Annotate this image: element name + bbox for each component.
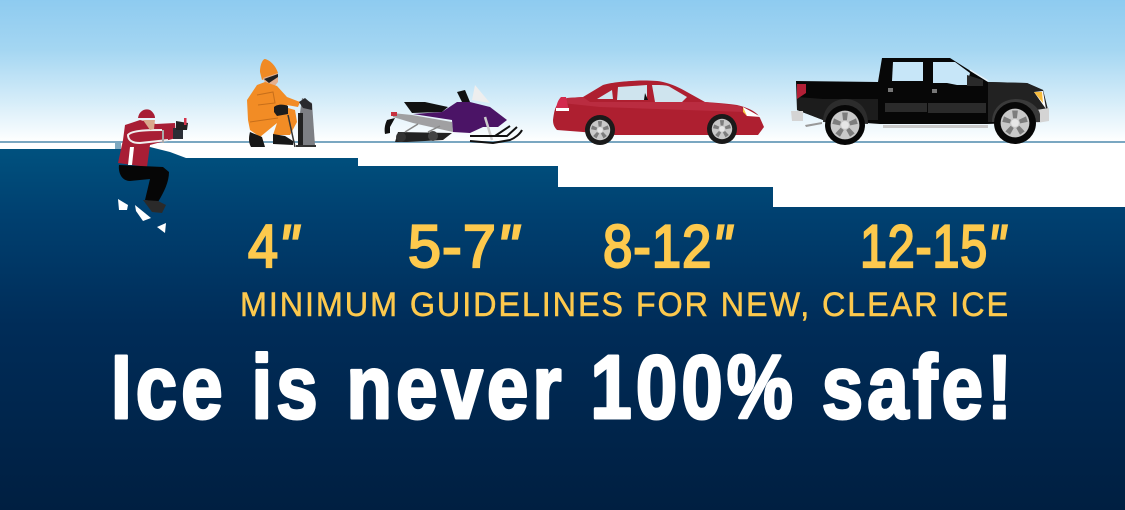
ice sheet with stepped thickness <box>0 143 1125 207</box>
thickness label: 12-15 inches: 12-15" <box>860 213 1007 280</box>
water <box>0 142 1125 510</box>
thickness label: 8-12 inches: 8-12" <box>603 213 733 280</box>
subheading: MINIMUM GUIDELINES FOR NEW, CLEAR ICE <box>240 286 1010 324</box>
thickness label: 5-7 inches: 5-7" <box>408 213 521 280</box>
icon: black pickup truck <box>791 58 1049 145</box>
icon: purple snowmobile <box>385 85 522 143</box>
icon: person falling through ice <box>115 109 188 233</box>
sky background <box>0 0 1125 142</box>
thickness label: 4 inches: 4" <box>248 213 301 280</box>
horizon line <box>0 141 1125 143</box>
icon: ice fisher with auger <box>247 59 316 147</box>
icon: red sedan <box>553 81 764 145</box>
